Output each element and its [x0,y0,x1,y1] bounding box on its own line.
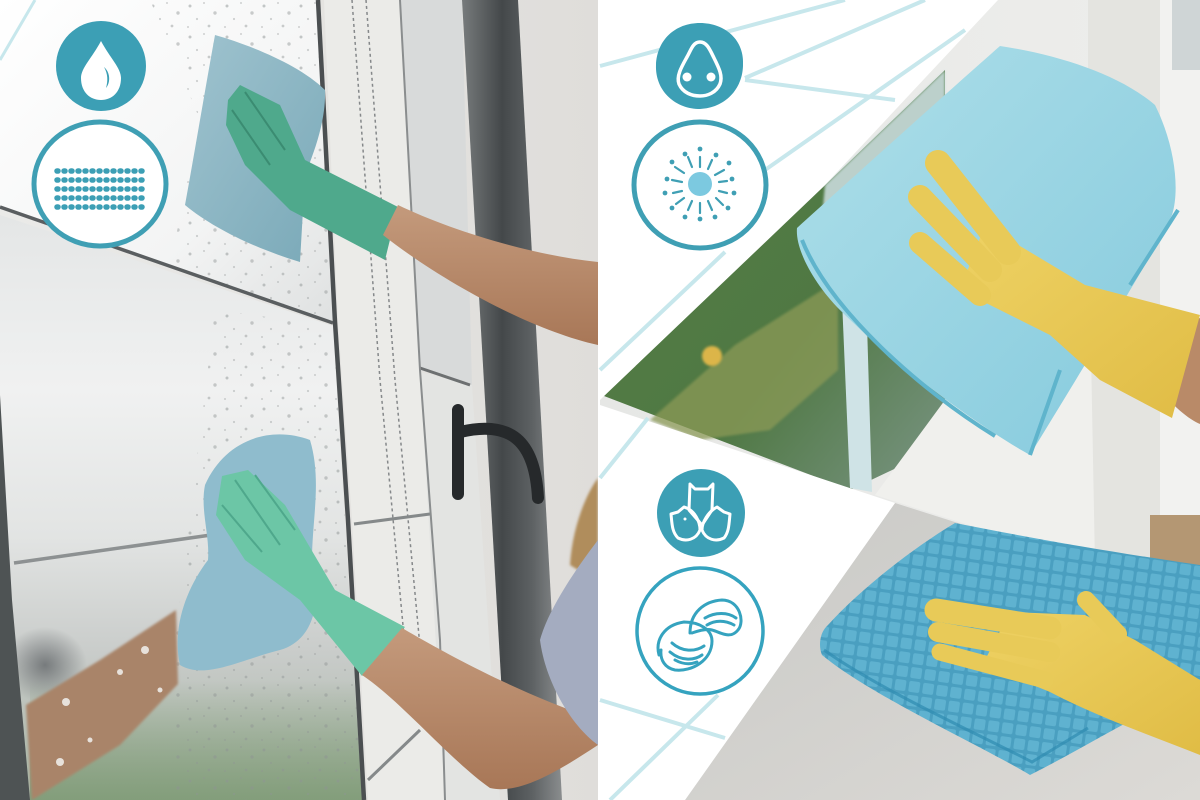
photo panel: top right, yellow glove on blue towel [600,0,1200,800]
upper glove [226,85,398,260]
lower pane crossbar [14,534,218,563]
upper arm [383,205,598,345]
lower arm [362,628,598,789]
white geometric panel: bottom [600,405,895,800]
white geometric panel: top [600,0,998,400]
lower pane droplets [175,310,362,800]
wood floor [1150,515,1200,610]
garden light [702,346,722,366]
room background [600,0,1200,800]
window frame [842,290,872,492]
lower glass pane [0,292,362,800]
decorative lines [600,0,965,370]
decorative lines [600,418,725,800]
towel edge fold [802,210,1178,455]
upper towel [185,35,325,262]
lower white panel beside frame [420,372,500,800]
lower glove [216,470,405,676]
hair [570,478,598,570]
dark door frame [462,0,562,800]
stitched seams [351,0,404,630]
photo panel: left, green gloves wiping wet window [0,0,598,800]
reflected arm [26,610,178,800]
decorative corner line on left photo [0,0,35,60]
blurred street scene [3,627,362,800]
distant window [1172,0,1200,70]
icon: dirt particles burst circle [634,122,766,248]
upper pane droplets [150,0,333,322]
upper glass pane [0,0,328,292]
yellow glove [920,163,1200,418]
wall column [1088,0,1160,580]
reflected water drops [56,646,162,766]
panel joint bottom [368,730,420,780]
panel joint lower [354,514,430,524]
door handle [458,410,538,498]
pane crossbar [0,207,333,323]
waffle towel [820,523,1200,775]
pale upper glass [820,70,945,240]
left dark frame [0,395,30,800]
window sill [875,300,1095,565]
bright window column [1160,0,1200,520]
icon: water drop [56,21,146,111]
panel joint [420,368,470,385]
icon: bacteria cluster [657,469,745,557]
yellow glove on towel [936,600,1200,755]
white side panels [324,0,445,800]
table surface [685,503,1200,800]
main mullion [318,0,364,800]
icon: microfiber weave circle [34,122,166,246]
icon: droplet face [656,23,743,109]
reflected arm in glass [650,280,838,440]
icon: fibre loops circle [637,568,763,694]
vertical panel line [400,0,445,800]
towel shadow fold [824,650,1088,762]
shirt sleeve [540,540,598,745]
second stitched seam [365,0,420,637]
green garden through window [604,70,945,490]
right arm [1158,318,1200,424]
lower towel [178,434,316,670]
upper gray panel beside frame [400,0,472,385]
right towel [797,46,1176,455]
photo panel: bottom right, table with blue waffle towel [685,503,1200,800]
wall and outer panels [0,0,598,800]
